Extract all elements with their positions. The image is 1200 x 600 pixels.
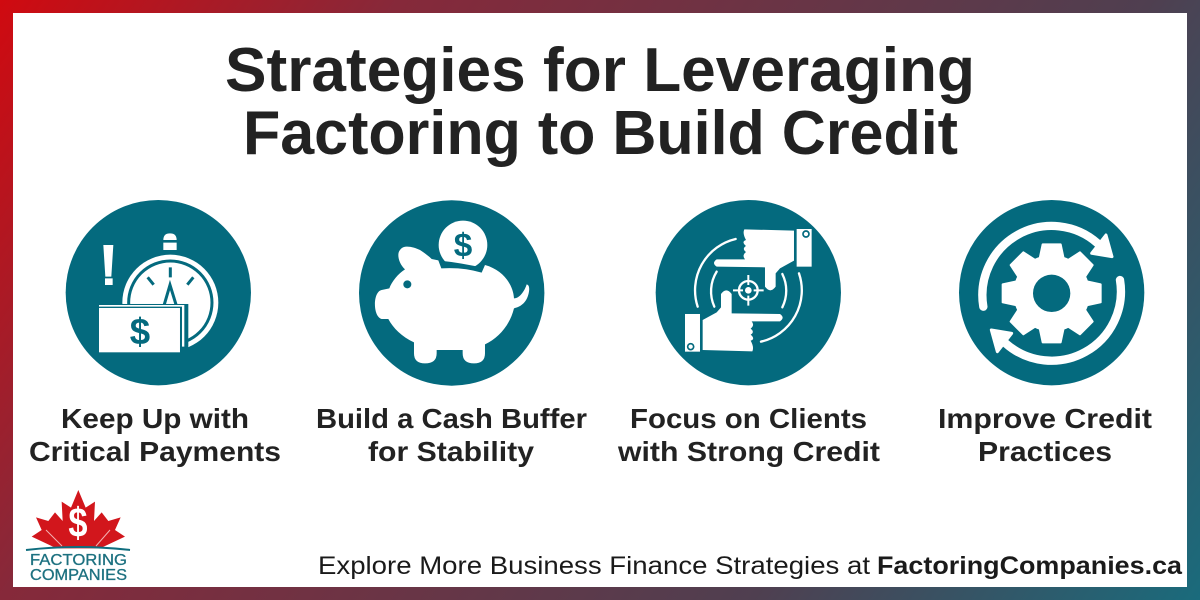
label: strong credit clients: Focus on Clients: [630, 403, 867, 434]
label: cash buffer: for Stability: [368, 436, 534, 467]
logo: factoring companies: [26, 490, 130, 584]
logo wordmark: COMPANIES: [30, 567, 127, 584]
banknote: $: [130, 311, 150, 352]
title: Strategies for Leveraging: [225, 36, 975, 105]
target: [733, 275, 764, 306]
icon: gear with cycle arrows: [959, 200, 1144, 385]
label: critical payments: Critical Payments: [29, 436, 281, 467]
logo arc: [26, 547, 130, 550]
pig artwork: [375, 221, 529, 363]
focus arcs: [695, 239, 802, 342]
label: critical payments: [29, 403, 281, 467]
top hand: [714, 229, 812, 290]
logo wordmark: [30, 552, 127, 584]
upper cycle arrow: [982, 226, 1112, 307]
maple leaf: [32, 490, 125, 548]
footer call to action: [318, 552, 1183, 580]
label: strong credit clients: [617, 403, 880, 467]
lower cycle arrow: [991, 280, 1121, 361]
icon: piggy bank: [359, 200, 544, 386]
pig eye: [403, 280, 411, 288]
icon: stopwatch and money: [66, 200, 251, 385]
leaf veins: [46, 530, 110, 546]
title: Factoring to Build Credit: [243, 99, 958, 168]
icon: hands framing target: [656, 200, 841, 385]
label: cash buffer: [316, 403, 587, 467]
bottom hand: [685, 290, 783, 352]
label: strong credit clients: with Strong Credit: [617, 436, 880, 467]
stopwatch: [122, 233, 218, 351]
label: cash buffer: Build a Cash Buffer: [316, 403, 587, 434]
label: credit practices: [938, 403, 1152, 467]
logo dollar sign: $: [68, 500, 88, 547]
title: [225, 36, 975, 168]
coin: $: [454, 227, 473, 264]
label: credit practices: Practices: [978, 436, 1112, 467]
label: credit practices: Improve Credit: [938, 403, 1152, 434]
exclamation mark: [103, 245, 113, 285]
footer call to action: FactoringCompanies.ca: [877, 552, 1183, 580]
pig body: [375, 247, 529, 363]
logo wordmark: FACTORING: [30, 552, 127, 569]
label: critical payments: Keep Up with: [61, 403, 249, 434]
banknote: [95, 304, 188, 357]
coin: [439, 221, 487, 269]
footer call to action: Explore More Business Finance Strategies at: [318, 552, 870, 580]
coin slot: [438, 260, 485, 275]
gear: [1003, 244, 1101, 342]
